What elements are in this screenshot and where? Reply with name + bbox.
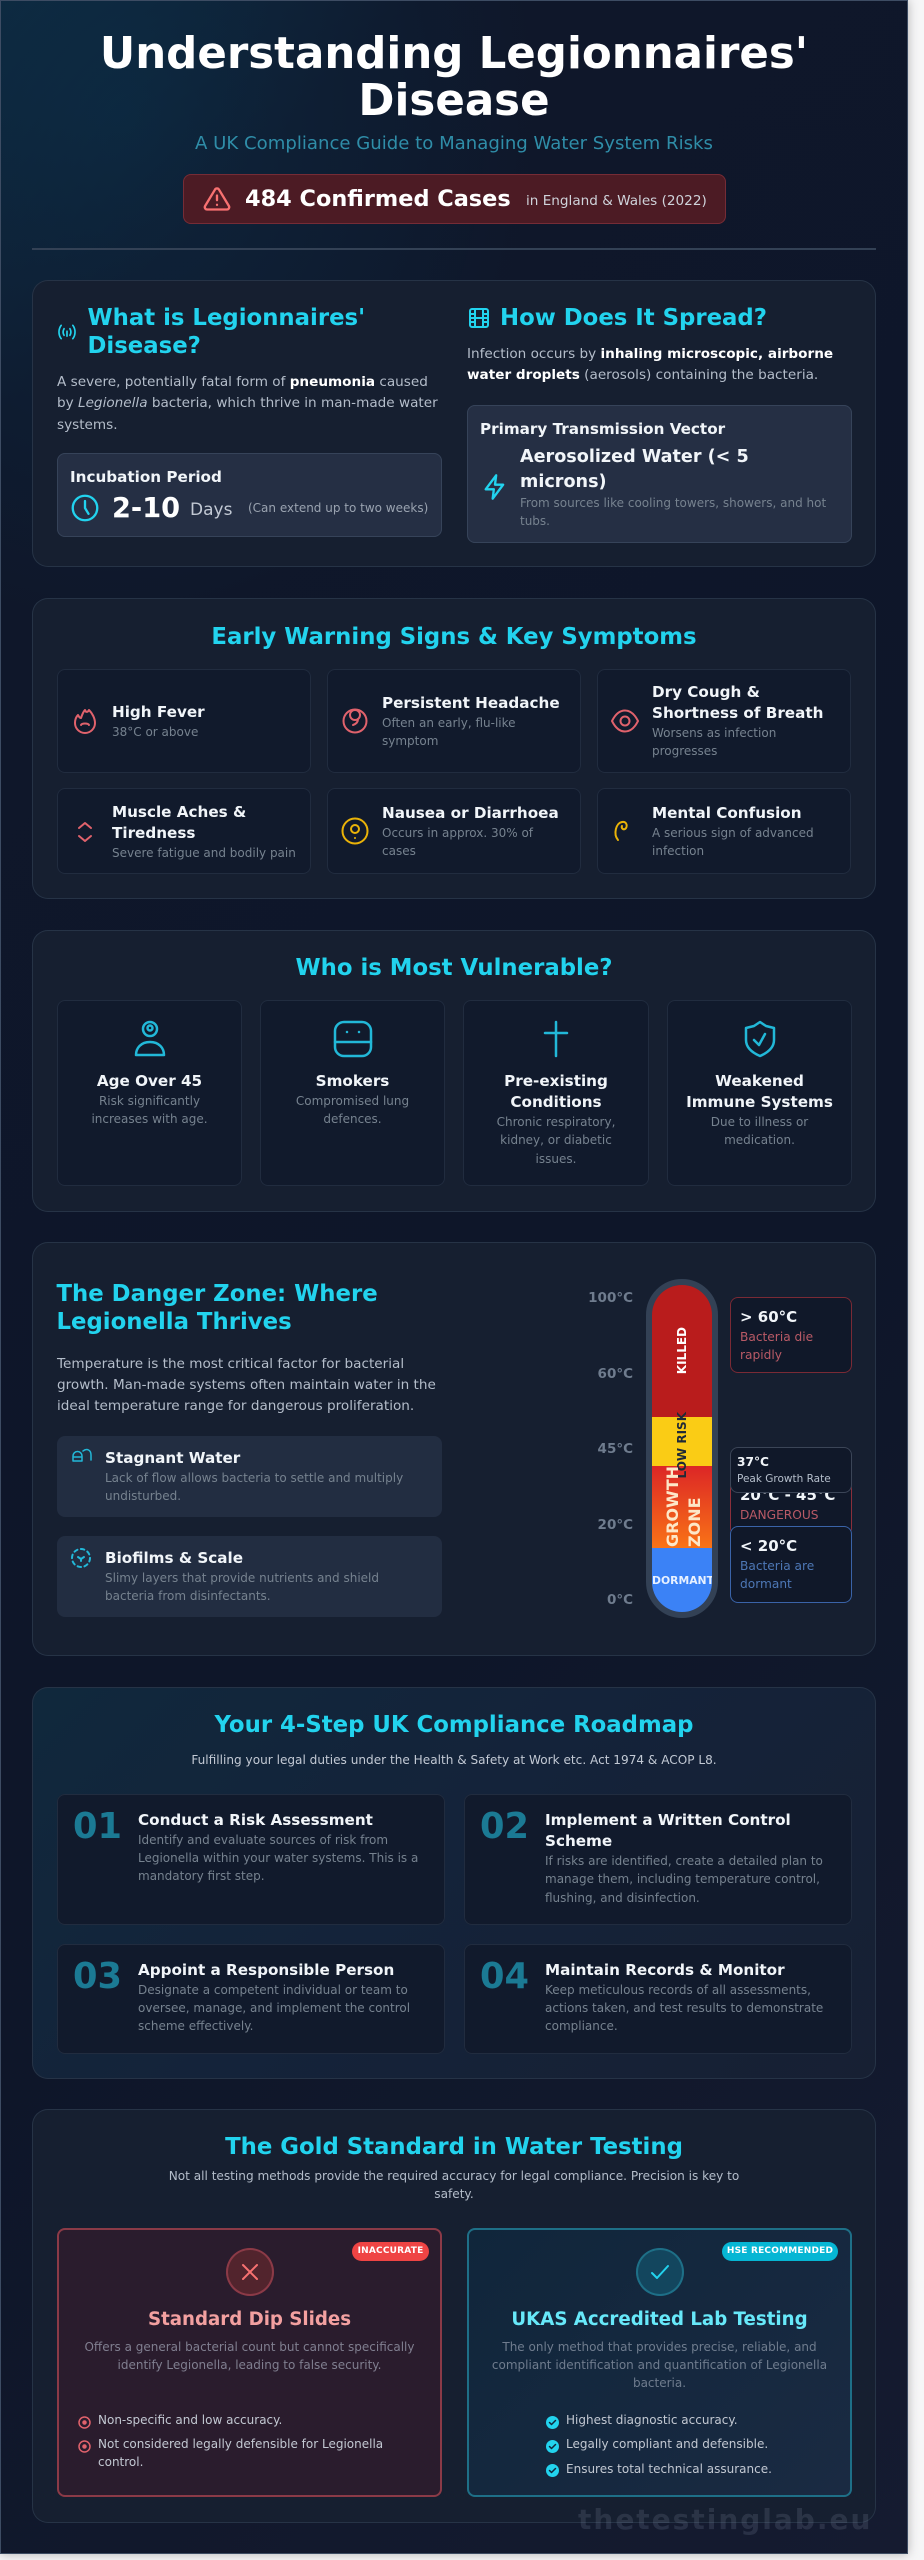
text: biofilms and scale: Slimy layers that provide nutrients and shield xyxy=(105,1571,379,1585)
list: dip slides drawbacks xyxy=(77,2411,417,2471)
card: step 1 xyxy=(57,1794,445,1925)
panel: water testing xyxy=(32,2109,876,2523)
text: stagnant water: undisturbed. xyxy=(105,1489,181,1503)
badge: inaccurate: INACCURATE xyxy=(358,2246,423,2256)
heading: what is legionnaires' disease xyxy=(88,305,365,359)
text: step 4: Keep meticulous records of all assessments, xyxy=(545,1983,811,1997)
icon: cross bullet xyxy=(78,2440,91,2453)
heading: who is most vulnerable: Who is Most Vulnerable? xyxy=(295,955,613,981)
text: age over 45 xyxy=(91,1072,208,1126)
text: step 3: scheme effectively. xyxy=(138,2019,253,2033)
icon: shield check xyxy=(744,1020,776,1058)
text: pre-existing conditions: Pre-existing xyxy=(504,1072,608,1090)
text: above 60 xyxy=(740,1306,813,1364)
icon: stagnant water xyxy=(72,1448,92,1462)
text: lab testing description: The only method that provides precise, reliable, and xyxy=(502,2340,817,2354)
text: highest accuracy: Highest diagnostic accuracy. xyxy=(566,2413,738,2427)
title: standard dip slides: Standard Dip Slides xyxy=(148,2309,351,2330)
callout: above 60 xyxy=(730,1297,852,1373)
text: dry cough: Shortness of Breath xyxy=(652,704,823,722)
note: sources: tubs. xyxy=(520,514,550,528)
heading: the danger zone: Legionella Thrives xyxy=(56,1309,292,1335)
label: killed: KILLED xyxy=(675,1327,689,1374)
unit: days: Days xyxy=(190,500,232,520)
text: dip slides description: Offers a general bacterial count but cannot specifically xyxy=(84,2340,414,2354)
text: lab testing description: bacteria. xyxy=(633,2376,686,2390)
text: nausea: cases xyxy=(382,844,416,858)
text: 20 to 45 xyxy=(740,1484,835,1524)
icon: cross in circle xyxy=(226,2248,274,2296)
text: mental confusion: infection xyxy=(652,844,704,858)
text: biofilms and scale: bacteria from disinfectants. xyxy=(105,1589,271,1603)
text: nausea: Nausea or Diarrhoea xyxy=(382,804,559,822)
icon: clock xyxy=(72,494,98,522)
text: legal duties: Fulfilling your legal duties under the Health & Safety at Work etc. Act 1974 & ACOP L8. xyxy=(191,1753,717,1767)
title: Understanding Legionnaires' xyxy=(100,29,808,79)
text: step 3: Designate a competent individual or team to xyxy=(138,1983,408,1997)
text: infection route: water droplets (aerosols) containing the bacteria. xyxy=(467,367,818,383)
icon: check bullet xyxy=(546,2464,559,2477)
text: biofilms and scale xyxy=(105,1548,379,1603)
text: step 1 xyxy=(138,1810,418,1885)
icon: up and down chevrons xyxy=(78,822,92,842)
text: age over 45: Age Over 45 xyxy=(97,1072,202,1090)
text: dry cough: progresses xyxy=(652,744,717,758)
value: aerosolized water: microns) xyxy=(520,472,607,492)
text: weakened immune systems: medication. xyxy=(724,1133,795,1147)
text: step 2: Implement a Written Control xyxy=(545,1810,791,1828)
text: smokers: Compromised lung xyxy=(296,1094,409,1108)
text: not defensible: Not considered legally defensible for Legionella xyxy=(98,2437,383,2451)
card: step 2 xyxy=(464,1794,852,1925)
text: above 60: rapidly xyxy=(740,1348,782,1362)
zone: killed xyxy=(652,1285,712,1417)
heading: how does it spread: How Does It Spread? xyxy=(500,305,767,331)
text: nausea xyxy=(382,804,559,858)
label: primary transmission vector: Primary Transmission Vector xyxy=(480,420,725,438)
text: pre-existing conditions: issues. xyxy=(536,1152,576,1166)
text: definition: by Legionella bacteria, which thrive in man-made water xyxy=(57,395,438,411)
scale: temperature labels: 45°C xyxy=(598,1441,633,1457)
text: peak growth: 37°C xyxy=(737,1455,769,1469)
text: biofilms and scale: Biofilms & Scale xyxy=(105,1548,243,1566)
text: weakened immune systems: Immune Systems xyxy=(686,1093,833,1111)
icon: signal waves xyxy=(58,324,76,340)
label: low risk: LOW RISK xyxy=(675,1412,689,1478)
text: 20 to 45: DANGEROUS xyxy=(740,1508,818,1522)
card: dry cough xyxy=(597,669,851,773)
text: step 1: Identify and evaluate sources of risk from xyxy=(138,1833,388,1847)
icon: check bullet xyxy=(546,2440,559,2453)
text: non-specific: Non-specific and low accuracy. xyxy=(98,2413,282,2427)
step number: 03 xyxy=(73,1956,122,1997)
text: dip slides description xyxy=(57,2338,442,2374)
callout: peak growth xyxy=(730,1447,852,1493)
text: above 60: > 60°C xyxy=(740,1308,797,1326)
icon: flame xyxy=(74,709,96,734)
badge: HSE recommended: HSE RECOMMENDED xyxy=(727,2246,833,2256)
text: peak growth: Peak Growth Rate xyxy=(737,1473,831,1485)
card: persistent headache xyxy=(327,669,581,773)
title xyxy=(100,29,808,126)
zone: growth xyxy=(652,1466,712,1548)
text: dip slides description: identify Legionella, leading to false security. xyxy=(118,2358,382,2372)
panel: what is and how it spreads xyxy=(32,280,876,567)
text: muscle aches: Severe fatigue and bodily pain xyxy=(112,846,296,860)
text: mental confusion xyxy=(652,804,814,858)
text: infection route: Infection occurs by inhaling microscopic, airborne xyxy=(467,346,833,362)
scale: temperature labels xyxy=(588,1290,633,1608)
text: temperature explanation: Temperature is the most critical factor for bacterial xyxy=(57,1356,404,1372)
text: step 2: If risks are identified, create a detailed plan to xyxy=(545,1854,823,1868)
panel: symptoms xyxy=(32,598,876,899)
text: step 2: Scheme xyxy=(545,1832,612,1850)
note: sources: From sources like cooling towers, showers, and hot xyxy=(520,496,826,510)
label: dormant: DORMANT xyxy=(652,1574,714,1587)
scale: temperature labels: 100°C xyxy=(588,1290,633,1306)
card: UKAS lab testing xyxy=(467,2228,852,2497)
heading: the danger zone xyxy=(56,1281,378,1335)
icon: biofilm xyxy=(71,1548,91,1568)
text: legally compliant: Legally compliant and defensible. xyxy=(566,2437,768,2451)
text: smokers xyxy=(296,1072,409,1126)
text: mental confusion: Mental Confusion xyxy=(652,804,802,822)
text: stagnant water: Lack of flow allows bacteria to settle and multiply xyxy=(105,1471,403,1485)
subtitle: A UK Compliance Guide to Managing Water System Risks xyxy=(195,133,713,154)
text: pre-existing conditions: Conditions xyxy=(510,1093,602,1111)
text: high fever: 38°C or above xyxy=(112,725,198,739)
card: high fever xyxy=(57,669,311,773)
text: age over 45: increases with age. xyxy=(91,1112,208,1126)
heading: roadmap: Your 4-Step UK Compliance Roadmap xyxy=(215,1712,693,1738)
icon: spiral xyxy=(614,820,628,841)
text: dry cough: Dry Cough & xyxy=(652,682,760,700)
text: high fever xyxy=(112,702,205,739)
text: muscle aches: Muscle Aches & xyxy=(112,802,246,820)
text: temperature explanation: ideal temperature range for dangerous proliferation. xyxy=(57,1398,414,1414)
text: below 20: < 20°C xyxy=(740,1536,797,1554)
label: growth zone xyxy=(663,1466,704,1547)
text: step 1: Conduct a Risk Assessment xyxy=(138,1810,373,1828)
header xyxy=(100,29,808,224)
text: step 3: Appoint a Responsible Person xyxy=(138,1960,394,1978)
text: step 1: mandatory first step. xyxy=(138,1869,265,1883)
icon: head xyxy=(342,708,368,734)
label: growth zone: ZONE xyxy=(685,1497,704,1547)
icon: eye xyxy=(611,710,639,732)
text: definition xyxy=(57,374,438,433)
heading: what is legionnaires' disease: What is Legionnaires' xyxy=(88,305,365,331)
card: smokers xyxy=(260,1000,445,1186)
text: testing intro: safety. xyxy=(434,2187,474,2201)
icon: check bullet xyxy=(546,2416,559,2429)
text: high fever: High Fever xyxy=(112,702,205,720)
box: biofilms and scale xyxy=(57,1536,442,1617)
text: below 20: Bacteria are xyxy=(740,1558,814,1572)
text: persistent headache: Persistent Headache xyxy=(382,694,560,712)
text: persistent headache: symptom xyxy=(382,734,438,748)
box: primary transmission vector xyxy=(467,405,852,543)
text: stagnant water: Stagnant Water xyxy=(105,1448,240,1466)
text: step 2: manage them, including temperature control, xyxy=(545,1872,820,1886)
text: testing intro: Not all testing methods provide the required accuracy for legal compliance. Precision is key to xyxy=(169,2169,739,2183)
heading: early warning signs: Early Warning Signs & Key Symptoms xyxy=(211,624,697,650)
card: step 4 xyxy=(464,1944,852,2054)
callout: 20 to 45 xyxy=(730,1476,852,1536)
text: below 20 xyxy=(740,1536,814,1593)
text: age over 45: Risk significantly xyxy=(99,1094,200,1108)
text: weakened immune systems xyxy=(686,1072,833,1147)
heading: what is legionnaires' disease: Disease? xyxy=(88,333,201,359)
callout: below 20 xyxy=(730,1526,852,1603)
text: step 2: flushing, and disinfection. xyxy=(545,1890,700,1904)
text: smokers: Smokers xyxy=(316,1072,389,1090)
panel: compliance roadmap xyxy=(32,1687,876,2079)
text: not defensible xyxy=(98,2435,383,2471)
text: dry cough: Worsens as infection xyxy=(652,726,776,740)
text: not defensible: control. xyxy=(98,2455,143,2469)
badge: inaccurate xyxy=(352,2242,429,2261)
icon: warning triangle xyxy=(204,187,230,211)
text: definition: A severe, potentially fatal form of pneumonia caused xyxy=(57,374,428,390)
panel: danger zone xyxy=(32,1242,876,1656)
text: step 3: oversee, manage, and implement the control xyxy=(138,2001,410,2015)
value: aerosolized water xyxy=(520,447,749,492)
title: UKAS accredited lab testing: UKAS Accredited Lab Testing xyxy=(511,2309,808,2330)
card: dip slides xyxy=(57,2228,442,2497)
card: muscle aches xyxy=(57,788,311,874)
text: infection route xyxy=(467,346,833,383)
text: lab testing description: compliant identification and quantification of Legionella xyxy=(492,2358,827,2372)
text: 20 to 45: 20°C - 45°C xyxy=(740,1486,835,1504)
icon: lungs box xyxy=(334,1020,372,1058)
text: lab testing description xyxy=(467,2338,852,2393)
card: pre-existing conditions xyxy=(463,1000,649,1186)
text: step 4: Maintain Records & Monitor xyxy=(545,1960,785,1978)
card: nausea xyxy=(327,788,581,874)
scale: temperature labels: 0°C xyxy=(607,1592,633,1608)
text: stagnant water xyxy=(105,1448,403,1503)
case count note: in England & Wales (2022) xyxy=(526,193,707,209)
text: pre-existing conditions xyxy=(497,1072,615,1166)
badge: HSE recommended xyxy=(722,2242,838,2261)
zone: dormant xyxy=(652,1548,712,1612)
label: incubation period: Incubation Period xyxy=(70,468,222,486)
text: above 60: Bacteria die xyxy=(740,1330,813,1344)
box: stagnant water xyxy=(57,1436,442,1517)
value: aerosolized water: Aerosolized Water (< 5 xyxy=(520,447,749,467)
text: temperature explanation: growth. Man-made systems often maintain water in the xyxy=(57,1377,436,1393)
card: mental confusion xyxy=(597,788,851,874)
zone: low risk xyxy=(652,1417,712,1466)
text: step 1: Legionella within your water systems. This is a xyxy=(138,1851,418,1865)
stat banner: confirmed cases xyxy=(183,174,726,224)
card: step 3 xyxy=(57,1944,445,2054)
text: step 4: actions taken, and test results to demonstrate xyxy=(545,2001,823,2015)
label: growth zone: GROWTH xyxy=(663,1466,682,1547)
card: weakened immune systems xyxy=(667,1000,852,1186)
text: step 4 xyxy=(545,1960,823,2035)
heading: gold standard: The Gold Standard in Water Testing xyxy=(225,2134,683,2160)
icon: lightning bolt xyxy=(484,474,504,500)
text: smokers: defences. xyxy=(323,1112,382,1126)
icon: target xyxy=(342,818,368,844)
icon: person xyxy=(134,1020,166,1056)
card: age over 45 xyxy=(57,1000,242,1186)
icon: cross xyxy=(544,1020,568,1058)
panel: vulnerable groups xyxy=(32,930,876,1212)
text: step 3 xyxy=(138,1960,410,2035)
value: days: 2-10 xyxy=(112,493,180,524)
text: nausea: Occurs in approx. 30% of xyxy=(382,826,533,840)
case count: 484 Confirmed Cases xyxy=(245,186,511,212)
icon: check in circle xyxy=(636,2248,684,2296)
text: mental confusion: A serious sign of advanced xyxy=(652,826,814,840)
note: extended incubation: (Can extend up to two weeks) xyxy=(248,501,428,515)
text: step 2 xyxy=(545,1810,823,1907)
text: pre-existing conditions: kidney, or diabetic xyxy=(500,1133,612,1147)
text: below 20: dormant xyxy=(740,1577,792,1591)
text: weakened immune systems: Weakened xyxy=(715,1072,804,1090)
watermark: thetestinglab.eu xyxy=(578,2503,872,2536)
text: muscle aches: Tiredness xyxy=(112,824,195,842)
heading: the danger zone: The Danger Zone: Where xyxy=(56,1281,378,1307)
text: step 4: compliance. xyxy=(545,2019,618,2033)
text: weakened immune systems: Due to illness or xyxy=(711,1115,808,1129)
text: definition: systems. xyxy=(57,417,118,433)
text: peak growth xyxy=(737,1453,831,1487)
note: sources xyxy=(520,496,826,528)
icon: film xyxy=(469,308,489,328)
text: technical assurance: Ensures total technical assurance. xyxy=(566,2462,772,2476)
text: dry cough xyxy=(652,682,823,758)
box: incubation period xyxy=(57,453,442,537)
step number: 02 xyxy=(480,1806,529,1847)
text: testing intro xyxy=(32,2167,876,2203)
text: temperature explanation xyxy=(56,1356,436,1414)
title: Disease xyxy=(358,76,550,126)
step number: 04 xyxy=(480,1956,529,1997)
text: muscle aches xyxy=(112,802,296,860)
text: persistent headache xyxy=(382,694,560,748)
scale: temperature labels: 20°C xyxy=(598,1517,633,1533)
text: persistent headache: Often an early, flu-like xyxy=(382,716,516,730)
scale: temperature labels: 60°C xyxy=(598,1366,633,1382)
list: lab testing benefits xyxy=(545,2411,785,2479)
text: pre-existing conditions: Chronic respiratory, xyxy=(497,1115,615,1129)
chart: thermometer xyxy=(646,1279,718,1618)
step number: 01 xyxy=(73,1806,122,1847)
icon: cross bullet xyxy=(78,2416,91,2429)
